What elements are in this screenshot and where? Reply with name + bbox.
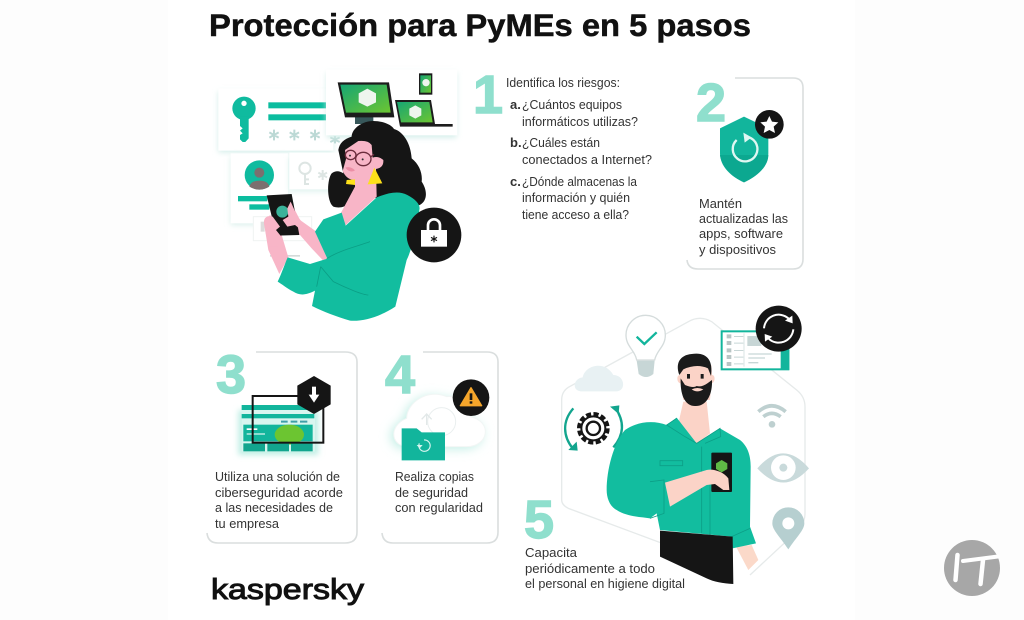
icon: light bulb: [626, 315, 665, 377]
step 1 text: información y quién: [522, 190, 630, 205]
panel: step 2: [687, 73, 803, 269]
step 3 text: Utiliza una solución de: [215, 469, 340, 484]
card: faded key: [289, 153, 344, 192]
number 4: 4: [385, 345, 415, 405]
card: user profile: [231, 153, 288, 225]
man: eyes and brows: [687, 374, 704, 379]
hands: [264, 202, 304, 247]
card: faded form: [253, 217, 312, 257]
step 5 text: [525, 545, 685, 591]
woman: glasses: [345, 150, 374, 166]
hexagon outline: [562, 318, 805, 575]
man: neck: [678, 402, 710, 444]
icon: eye: [757, 453, 809, 482]
logo: IT watermark: [944, 540, 1000, 596]
icon: sync badge: [756, 306, 802, 352]
step 2 text: y dispositivos: [699, 242, 776, 257]
number 3: 3: [216, 345, 246, 405]
logo: kaspersky: kaspersky: [211, 574, 365, 606]
illustration: browser window with shield alert: [238, 376, 331, 455]
step 1 text: c.: [510, 174, 521, 189]
step 1 text: ¿Cuáles están: [522, 135, 600, 150]
illustration: woman with security cards: [218, 69, 461, 321]
number 2: 2: [696, 73, 726, 133]
card: devices: [326, 69, 457, 138]
step 4 text: de seguridad: [395, 485, 468, 500]
icon: location pin: [772, 507, 804, 549]
step 4 text: Realiza copias: [395, 469, 474, 484]
man: hair: [678, 354, 711, 376]
step 2 text: apps, software: [699, 226, 783, 241]
step 4 text: con regularidad: [395, 500, 483, 515]
man: beard: [681, 378, 712, 406]
step 5 text: el personal en higiene digital: [525, 576, 685, 591]
illustration: man with hexagon of icons: [562, 306, 809, 584]
man: forearm and hand: [665, 470, 729, 507]
woman: hair: [328, 121, 426, 208]
step 3 text: ciberseguridad acorde: [215, 485, 343, 500]
icon: checklist screen: [722, 331, 789, 370]
icon: shield with star: [720, 110, 784, 182]
panel: step 3: [207, 345, 357, 543]
step 1 text: b.: [510, 135, 522, 150]
step 5 text: periódicamente a todo: [525, 561, 655, 576]
step 1 text: Identifica los riesgos:: [506, 75, 620, 90]
number 5: 5: [524, 490, 554, 550]
icon: wifi: [758, 406, 786, 426]
man: trousers: [660, 531, 733, 584]
man: phone: [711, 453, 732, 492]
man: head: [677, 365, 715, 400]
icon: padlock: [407, 208, 461, 262]
step 2 text: actualizadas las: [699, 211, 788, 226]
sweater: [278, 192, 420, 321]
number 1: 1: [473, 65, 503, 125]
step 3 text: tu empresa: [215, 516, 280, 531]
step 4 text: [395, 469, 483, 515]
step 3 text: [215, 469, 343, 531]
step 1 text: ¿Cuántos equipos: [522, 97, 622, 112]
panel: step 5: [524, 306, 809, 591]
step 5 text: Capacita: [525, 545, 578, 560]
woman: earrings: [346, 168, 382, 185]
step 1 text: informáticos utilizas?: [522, 114, 638, 129]
step 1 text: tiene acceso a ella?: [522, 207, 629, 222]
step 2 text: [699, 196, 788, 257]
man: shirt: [607, 418, 756, 548]
step 1 text: a.: [510, 97, 521, 112]
card: key and password: [218, 88, 340, 152]
man: right arm: [736, 545, 758, 570]
title: Protección para PyMEs en 5 pasos: [209, 7, 751, 43]
icon: gear with arrows: [565, 405, 622, 451]
step 3 text: a las necesidades de: [215, 500, 333, 515]
step 1 text: ¿Dónde almacenas la: [522, 174, 638, 189]
step 1 text: conectados a Internet?: [522, 152, 652, 167]
woman: face and neck: [341, 141, 383, 226]
panel: step 4: [382, 345, 498, 543]
step 2 text: Mantén: [699, 196, 742, 211]
tablet: [267, 194, 299, 236]
illustration: cloud, folder and warning: [391, 379, 489, 460]
forearms: [287, 202, 327, 260]
icon: cloud: [575, 366, 623, 391]
step 1 text: [506, 75, 652, 222]
